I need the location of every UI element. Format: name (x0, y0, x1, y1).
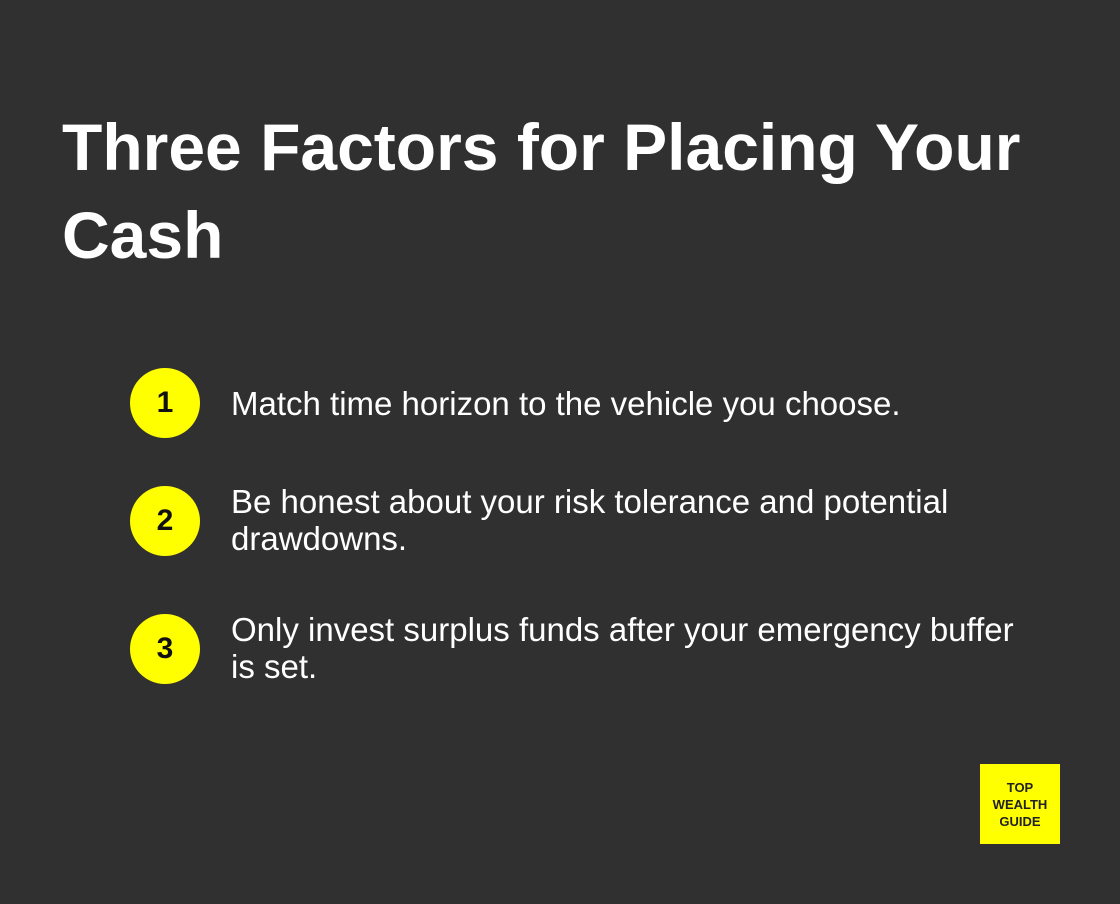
logo: GUIDE (999, 814, 1041, 828)
item 3 (130, 611, 1014, 685)
text 3: Only invest surplus funds after your emergency buffer is set. (231, 611, 1014, 685)
icon: number 3: 3 (157, 632, 173, 665)
item 2 (130, 483, 948, 557)
icon: number 3 (130, 614, 200, 684)
logo (980, 764, 1060, 844)
item 1 (130, 368, 901, 438)
logo: WEALTH (993, 796, 1047, 812)
icon: number 1 (130, 368, 200, 438)
icon: number 2 (130, 486, 200, 556)
text 2: Be honest about your risk tolerance and potential drawdowns. (231, 483, 948, 557)
text 1: Match time horizon to the vehicle you choose. (231, 385, 901, 422)
icon: number 1: 1 (157, 386, 173, 419)
logo: TOP (1007, 780, 1033, 794)
icon: number 2: 2 (157, 504, 173, 537)
title: Three Factors for Placing Your Cash (62, 110, 1020, 272)
